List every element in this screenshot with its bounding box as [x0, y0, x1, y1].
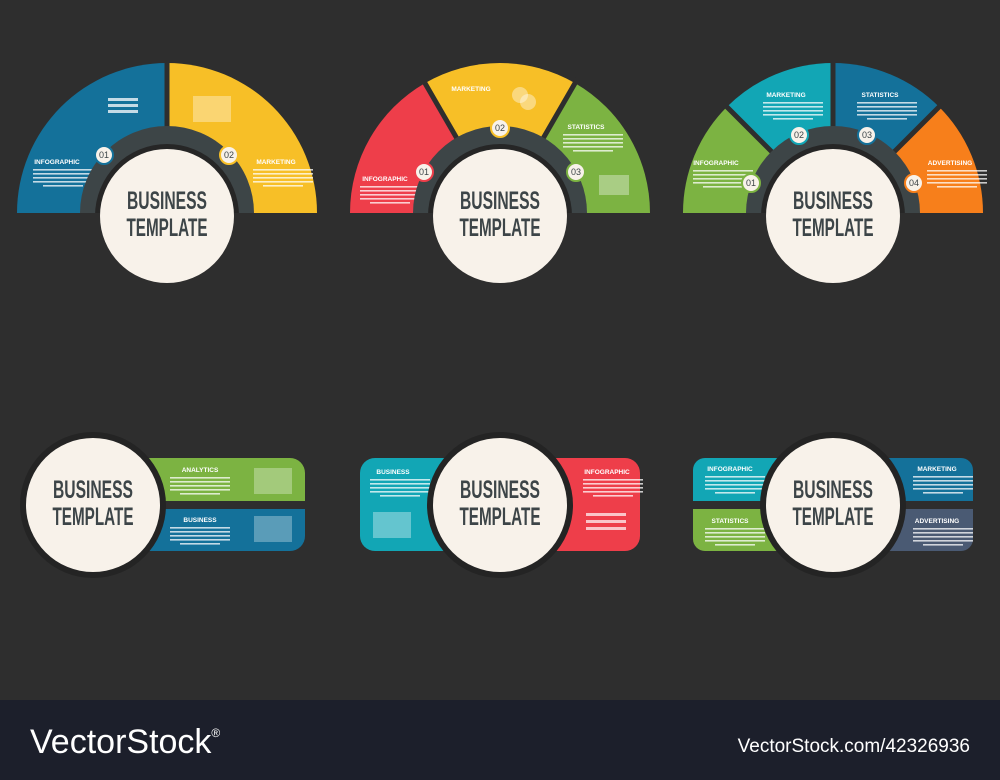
- badge 02: 02: [495, 123, 505, 133]
- segment: marketing: [167, 63, 317, 213]
- segment: marketing: MARKETING: [451, 86, 491, 93]
- segment: infographic: INFOGRAPHIC: [693, 160, 739, 167]
- badge 01: 01: [99, 150, 109, 160]
- center circle: [766, 438, 900, 572]
- card: business: BUSINESS: [376, 469, 410, 476]
- card: statistics: STATISTICS: [712, 518, 749, 525]
- segment: marketing: MARKETING: [766, 92, 806, 99]
- segment: marketing: MARKETING: [256, 159, 296, 166]
- segment: statistics: [500, 83, 650, 213]
- badge 04: 04: [909, 178, 919, 188]
- segment: marketing: [425, 63, 575, 213]
- footer url: VectorStock.com/42326936: [738, 736, 970, 757]
- segment: advertising: [833, 107, 987, 213]
- center circle: [100, 149, 234, 283]
- segment: statistics: [833, 63, 939, 213]
- badge 04: [905, 174, 923, 192]
- segment: marketing: [727, 63, 833, 213]
- badge 03: 03: [571, 167, 581, 177]
- badge 02: [790, 126, 808, 144]
- card: analytics: ANALYTICS: [182, 467, 219, 474]
- center circle: [433, 438, 567, 572]
- card: business: BUSINESS: [183, 517, 217, 524]
- card: advertising: ADVERTISING: [915, 518, 959, 525]
- center circle: [766, 149, 900, 283]
- badge 02: [491, 119, 509, 137]
- segment: infographic: INFOGRAPHIC: [34, 159, 80, 166]
- card: business: [360, 458, 460, 551]
- fan 1: two segments: [0, 60, 340, 313]
- bottom group 2: [360, 432, 643, 578]
- badge 03: 03: [862, 130, 872, 140]
- footer logo: ®: [211, 726, 220, 740]
- segment: infographic: [683, 107, 833, 213]
- segment: statistics: STATISTICS: [862, 92, 899, 99]
- segment: infographic: INFOGRAPHIC: [362, 176, 408, 183]
- badge 03: [858, 126, 876, 144]
- card: statistics: [693, 509, 790, 551]
- badge 03: [567, 163, 585, 181]
- badge 01: 01: [419, 167, 429, 177]
- card: advertising: [875, 509, 973, 551]
- card: infographic: [540, 458, 643, 551]
- segment: infographic: [17, 63, 167, 213]
- card: marketing: [875, 458, 973, 501]
- card: infographic: [693, 458, 790, 501]
- badge 01: [95, 146, 113, 164]
- card: business: [140, 509, 305, 551]
- fan 3: four segments: [670, 60, 1000, 313]
- badge 02: 02: [794, 130, 804, 140]
- bottom group 3: [693, 432, 973, 578]
- segment: statistics: STATISTICS: [568, 124, 605, 131]
- card: infographic: INFOGRAPHIC: [707, 466, 753, 473]
- bottom group 1: [20, 432, 305, 578]
- center circle: [433, 149, 567, 283]
- badge 01: [742, 174, 760, 192]
- segment: infographic: [350, 83, 500, 213]
- badge 01: [415, 163, 433, 181]
- badge 02: [220, 146, 238, 164]
- badge 01: 01: [746, 178, 756, 188]
- fan 2: three segments: [340, 63, 660, 313]
- segment: advertising: ADVERTISING: [928, 160, 972, 167]
- card: marketing: MARKETING: [917, 466, 957, 473]
- footer bar: [0, 700, 1000, 780]
- card: analytics: [140, 458, 305, 501]
- center circle: [26, 438, 160, 572]
- card: infographic: INFOGRAPHIC: [584, 469, 630, 476]
- footer logo: VectorStock: [30, 723, 211, 761]
- badge 02: 02: [224, 150, 234, 160]
